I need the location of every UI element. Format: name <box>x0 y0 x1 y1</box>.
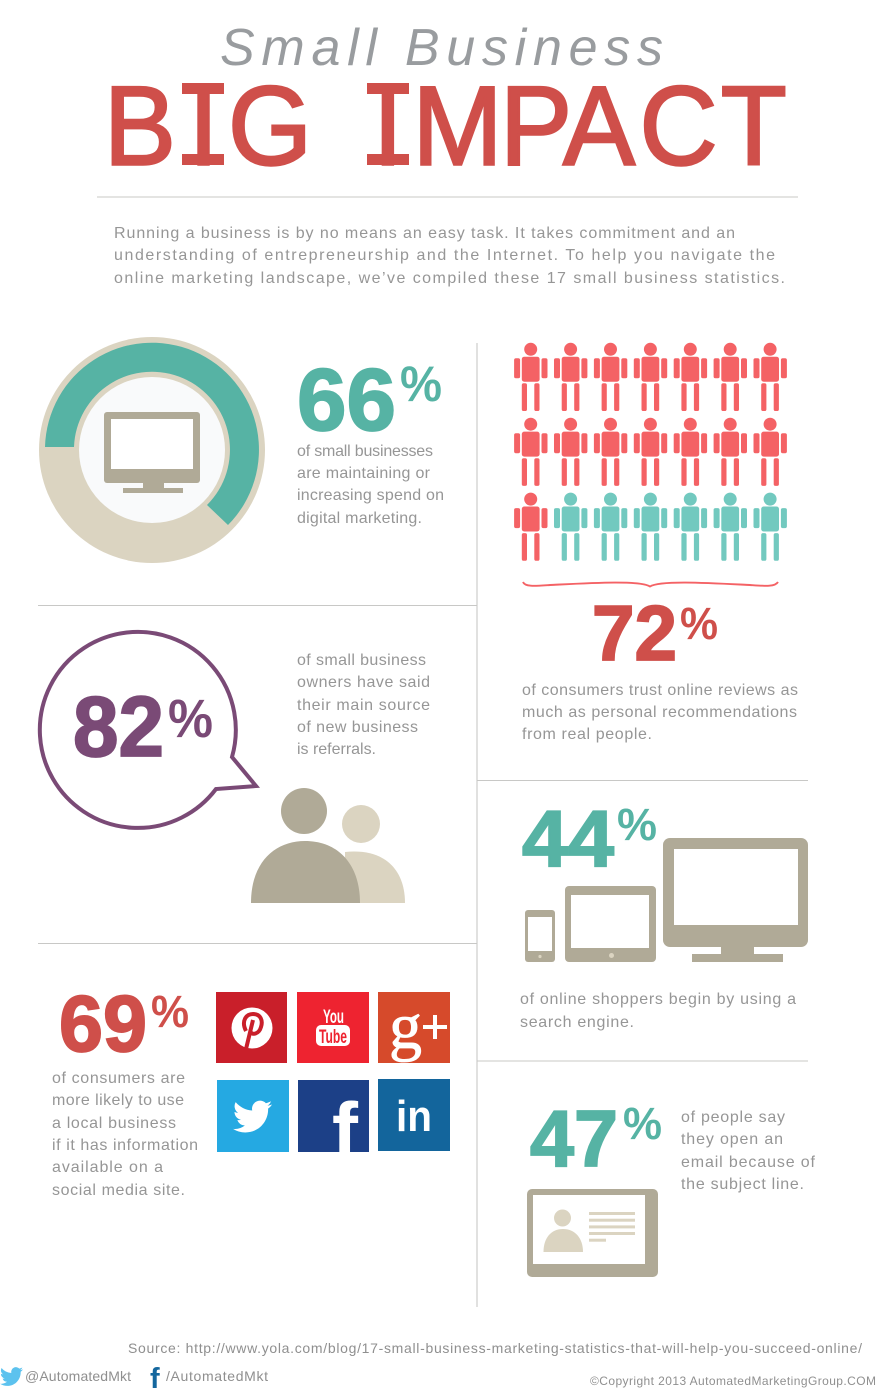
description 44%: of online shoppers begin by using a <box>520 991 796 1008</box>
description 69%: a local business <box>52 1115 176 1132</box>
description 47%: the subject line. <box>681 1176 804 1193</box>
icon: facebook <box>298 1080 369 1152</box>
source line: Source: http://www.yola.com/blog/17-small-business-marketing-statistics-that-will-help-you-succeed-online/ <box>128 1340 862 1356</box>
description 66%: increasing spend on <box>297 487 444 504</box>
stat 69%: 69 <box>59 979 147 1068</box>
icon: google plus: g <box>389 990 422 1063</box>
panel: 44 percent search engine <box>520 794 808 1031</box>
panel: 66 percent digital marketing <box>39 337 444 563</box>
stat 82% <box>73 680 213 775</box>
description 82%: their main source <box>297 697 430 714</box>
description 72%: of consumers trust online reviews as <box>522 682 798 699</box>
icon: phone <box>525 910 555 962</box>
description 69%: of consumers are <box>52 1070 185 1087</box>
description 69%: if it has information <box>52 1137 198 1154</box>
description 44%: search engine. <box>520 1014 634 1031</box>
description 66%: digital marketing. <box>297 510 422 527</box>
description 47% <box>681 1109 816 1193</box>
icon: youtube: You <box>323 1007 344 1028</box>
description 82%: of new business <box>297 719 418 736</box>
title: Small Business: Small Business <box>220 19 663 77</box>
dividers <box>38 197 808 1307</box>
stat 44% <box>522 794 657 883</box>
description 82%: is referrals. <box>297 741 376 758</box>
stat 66% <box>297 350 442 449</box>
description 66%: are maintaining or <box>297 465 431 482</box>
donut chart with monitor <box>39 337 265 563</box>
intro text: understanding of entrepreneurship and the Internet. To help you navigate the <box>114 247 775 264</box>
icon: email on tablet <box>527 1189 658 1277</box>
stat 72% <box>592 589 718 677</box>
footer: twitter handle <box>0 1367 131 1386</box>
stat 82%: 82 <box>73 680 164 775</box>
pictogram: 21 people <box>514 343 787 561</box>
copyright: ©Copyright 2013 AutomatedMarketingGroup.COM <box>590 1374 876 1388</box>
description 69%: social media site. <box>52 1182 185 1199</box>
footer: facebook handle: /AutomatedMkt <box>166 1368 268 1384</box>
stat 72%: 72 <box>592 589 677 677</box>
description 69%: available on a <box>52 1159 163 1176</box>
description 82% <box>297 652 430 758</box>
icon: pinterest <box>216 992 287 1063</box>
intro text: online marketing landscape, we’ve compiled these 17 small business statistics. <box>114 270 785 287</box>
description 69% <box>52 1070 198 1199</box>
stat 69% <box>59 979 189 1068</box>
panel: 82 percent referrals <box>40 632 430 903</box>
stat 66%: % <box>400 356 442 412</box>
footer: facebook handle <box>150 1363 268 1390</box>
intro text: Running a business is by no means an easy task. It takes commitment and an <box>114 225 735 242</box>
description 72%: from real people. <box>522 726 652 743</box>
icon: two people <box>251 788 405 903</box>
icon: monitor <box>663 838 808 962</box>
stat 82%: % <box>168 689 213 749</box>
brace <box>523 582 778 586</box>
description 82%: of small business <box>297 652 426 669</box>
stat 66%: 66 <box>297 350 396 449</box>
stat 44%: % <box>617 799 657 850</box>
title: BIG IMPACT: BIG IMPACT <box>104 64 787 189</box>
stat 47%: 47 <box>530 1094 618 1183</box>
icon: linkedin: in <box>396 1092 432 1141</box>
speech bubble <box>40 632 256 828</box>
icon: youtube: Tube <box>319 1027 347 1048</box>
description 47%: they open an <box>681 1131 783 1148</box>
stat 47%: % <box>623 1098 662 1149</box>
panel: 72 percent online reviews <box>514 343 798 743</box>
description 47%: of people say <box>681 1109 785 1126</box>
icon: youtube <box>297 992 369 1063</box>
stat 44%: 44 <box>522 794 615 883</box>
description 47%: email because of <box>681 1154 816 1171</box>
description 69%: more likely to use <box>52 1092 184 1109</box>
icon: tablet <box>565 886 656 962</box>
icon: twitter <box>217 1080 289 1152</box>
intro text <box>114 225 785 287</box>
icon: linkedin <box>378 1079 450 1151</box>
stat 72%: % <box>680 598 718 649</box>
description 44% <box>520 991 796 1031</box>
panel: 47 percent email subject line <box>527 1094 816 1277</box>
description 66% <box>297 443 444 527</box>
stat 47% <box>530 1094 662 1183</box>
description 66%: of small businesses <box>297 443 433 460</box>
panel: 69 percent social media <box>52 979 450 1199</box>
footer: twitter handle: @AutomatedMkt <box>25 1368 131 1384</box>
description 72%: much as personal recommendations <box>522 704 797 721</box>
icon: google plus <box>378 990 450 1063</box>
stat 69%: % <box>151 986 189 1037</box>
description 82%: owners have said <box>297 674 430 691</box>
description 72% <box>522 682 798 743</box>
icon: facebook: f <box>332 1086 359 1174</box>
